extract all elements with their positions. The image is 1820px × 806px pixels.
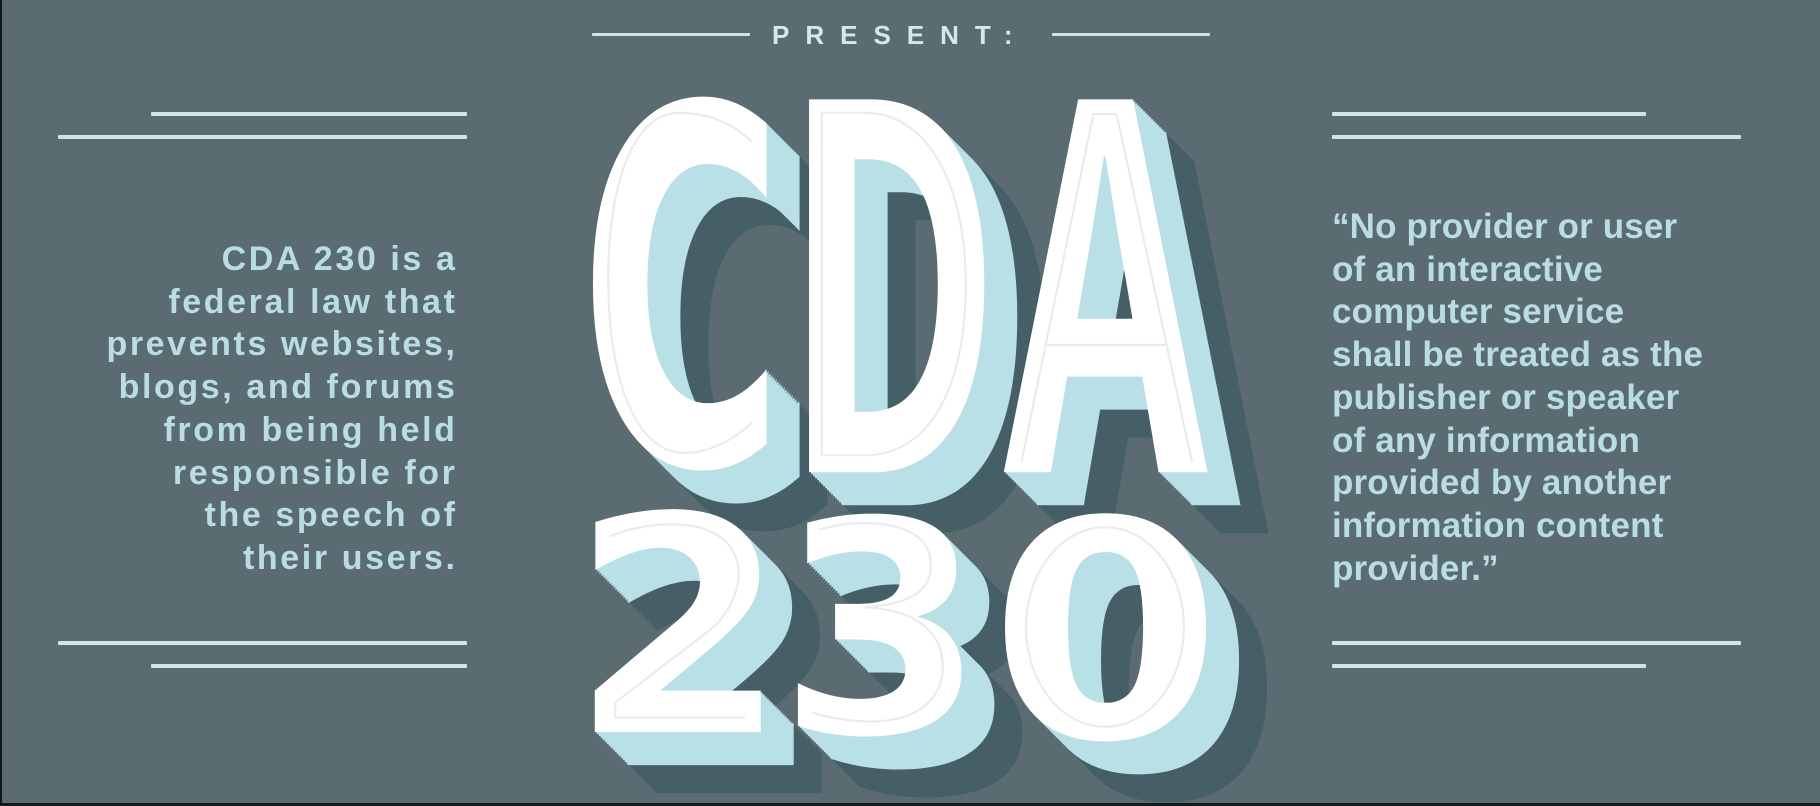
heading: PRESENT with flanking rules: [592, 20, 1210, 50]
text block: statute quotation: [1332, 207, 1703, 588]
text block: statute quotation: shall be treated as the: [1332, 335, 1703, 374]
text block: CDA 230 explanation: [106, 240, 458, 577]
right bottom double rule: [1332, 641, 1741, 668]
text block: CDA 230 explanation: federal law that: [168, 283, 458, 321]
heading: PRESENT with flanking rules: PRESENT:: [772, 20, 1029, 50]
text block: statute quotation: computer service: [1332, 292, 1624, 331]
text block: CDA 230 explanation: responsible for: [173, 454, 458, 492]
text block: statute quotation: provider.”: [1332, 549, 1499, 588]
numeral 3: 3: [778, 460, 985, 802]
text block: CDA 230 explanation: prevents websites,: [106, 325, 458, 363]
text block: CDA 230 explanation: blogs, and forums: [119, 368, 458, 406]
numeral 2: 2: [570, 454, 788, 803]
text block: statute quotation: of any information: [1332, 421, 1640, 460]
text block: CDA 230 explanation: their users.: [243, 539, 458, 577]
letter C: C: [579, 6, 784, 581]
right top double rule: [1332, 112, 1741, 139]
left bottom double rule: [58, 641, 467, 668]
text block: statute quotation: publisher or speaker: [1332, 378, 1679, 417]
text block: statute quotation: information content: [1332, 506, 1663, 545]
text block: CDA 230 explanation: the speech of: [205, 496, 458, 534]
text block: statute quotation: of an interactive: [1332, 250, 1603, 289]
text block: CDA 230 explanation: CDA 230 is a: [222, 240, 458, 278]
text block: CDA 230 explanation: from being held: [164, 411, 458, 449]
text block: statute quotation: “No provider or user: [1332, 207, 1677, 246]
numeral 0: 0: [989, 458, 1222, 806]
left top double rule: [58, 112, 467, 139]
text block: statute quotation: provided by another: [1332, 463, 1671, 502]
